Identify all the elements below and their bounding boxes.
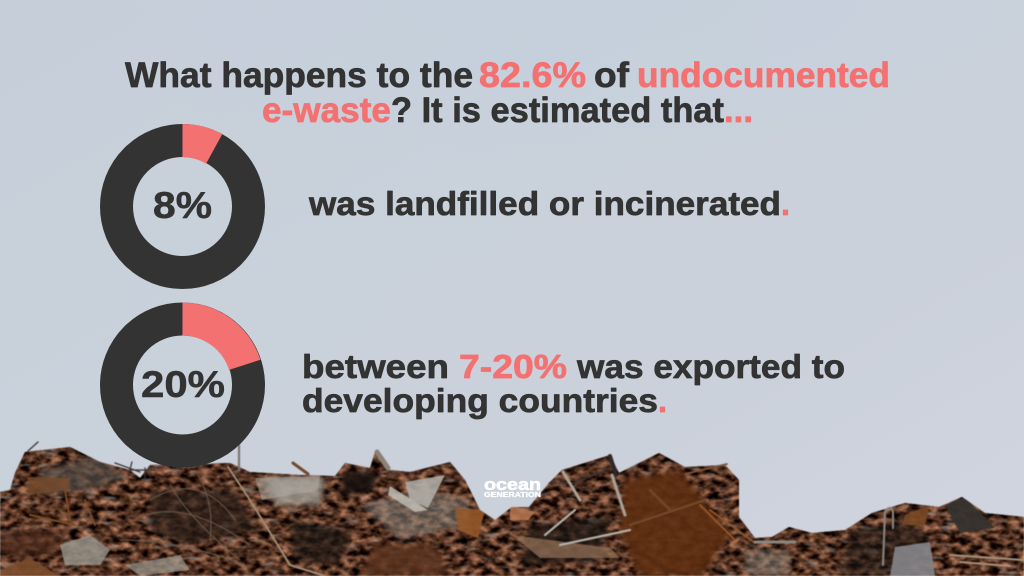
- title line 1: of: [594, 56, 629, 95]
- title line 2: [262, 91, 753, 130]
- statement: exported to developing countries: was exported to: [576, 348, 845, 385]
- donut chart: 20%: [116, 302, 260, 451]
- title line 1: [125, 56, 890, 95]
- logo: Ocean Generation: [484, 475, 541, 499]
- logo: Ocean Generation: GENERATION: [484, 490, 541, 499]
- statement: exported to developing countries: [302, 348, 845, 419]
- statement: landfilled or incinerated: .: [781, 185, 790, 222]
- statement: exported to developing countries: 7-20%: [459, 348, 567, 385]
- title line 2: e-waste: [262, 91, 391, 130]
- donut value: 8%: 8%: [153, 185, 212, 226]
- photo: scrap metal heap: [0, 440, 1024, 576]
- title line 2: ? It is estimated that: [391, 91, 724, 130]
- statement: exported to developing countries: .: [658, 382, 667, 419]
- statement: landfilled or incinerated: was landfilled or incinerated: [308, 185, 781, 222]
- donut chart: 8%: [116, 124, 248, 272]
- donut value: 20%: 20%: [141, 364, 225, 405]
- title line 1: 82.6%: [479, 56, 586, 95]
- logo: Ocean Generation: ocean: [484, 475, 541, 494]
- title: [125, 56, 890, 130]
- title line 1: What happens to the: [125, 56, 473, 95]
- statement: exported to developing countries: between: [302, 348, 449, 385]
- title line 1: undocumented: [637, 56, 890, 95]
- title line 2: ...: [724, 91, 753, 130]
- statement: exported to developing countries: developing countries: [302, 382, 658, 419]
